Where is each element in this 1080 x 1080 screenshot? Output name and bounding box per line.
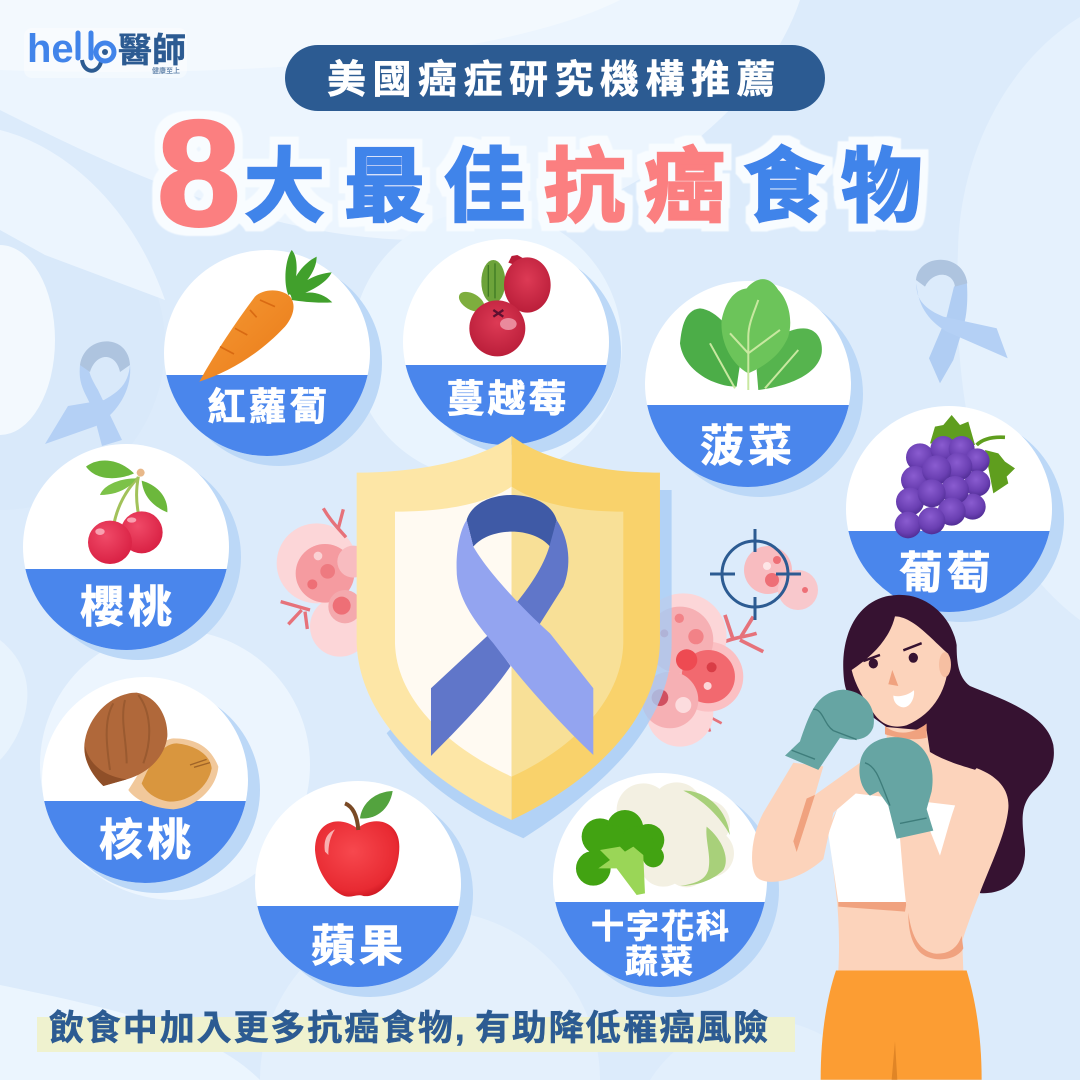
panel: carrot [160,250,382,466]
icon: spinach [680,279,822,390]
icon: cauliflower [617,782,734,887]
label: 葡萄 [899,549,995,598]
title: 佳 [444,143,525,233]
icon: cranberries [456,255,551,356]
icon: walnut [84,693,218,809]
icon: carrot [199,250,332,382]
bottom caption: 有助降低罹癌風險 [475,1009,770,1048]
title: 抗癌 [544,143,725,233]
panel: grapes [840,406,1064,622]
cancer cells right [640,593,763,747]
title: 大最 [244,143,425,233]
label: 十字花科 [591,908,731,945]
pants [821,971,982,1080]
torso [828,727,993,971]
hair [843,595,1054,893]
icon: cherries [86,461,167,564]
shield body [357,436,512,820]
neck shadow [885,723,927,739]
header pill: 美國癌症研究機構推薦 [327,59,782,102]
header pill [285,45,825,111]
left glove [785,690,874,770]
bottom caption [37,1009,795,1052]
ribbon: background left [45,341,130,446]
woman boxer [752,595,1054,1080]
logo: he [27,27,74,71]
right arm [900,768,1008,957]
title: 8 [157,89,240,257]
label: 蘋果 [311,922,407,971]
logo: 健康至上 [152,66,180,75]
icon: grapes [895,415,1015,538]
panel: cherries [20,444,241,660]
panel: cruciferous vegetables [550,773,779,997]
right glove [859,737,933,839]
panel: cruciferous vegetables: 蔬菜 [625,943,695,980]
panel: apple [250,781,473,997]
label: 蔓越莓 [446,379,570,421]
label: 櫻桃 [80,583,176,632]
icon: broccoli [576,810,664,895]
title [157,89,922,257]
panel: cranberry [400,239,621,455]
ribbon: background right [916,260,1008,383]
awareness ribbon [431,495,593,756]
icon: apple [315,791,399,897]
face [852,616,948,727]
left arm [752,763,867,882]
shield [277,436,763,838]
panel: spinach [640,279,863,497]
target crosshair with cell [710,529,818,620]
shield shadow [387,490,672,838]
label: 紅蘿蔔 [207,387,331,429]
label: 核桃 [99,816,195,865]
top [828,792,957,902]
panel: walnut [40,677,260,893]
bottom caption: 飲食中加入更多抗癌食物, [49,1009,467,1048]
logo [24,27,187,78]
cancer cells left [277,508,370,657]
title: 食物 [743,143,922,233]
label: 菠菜 [700,422,796,471]
logo: 醫師 [118,32,186,70]
